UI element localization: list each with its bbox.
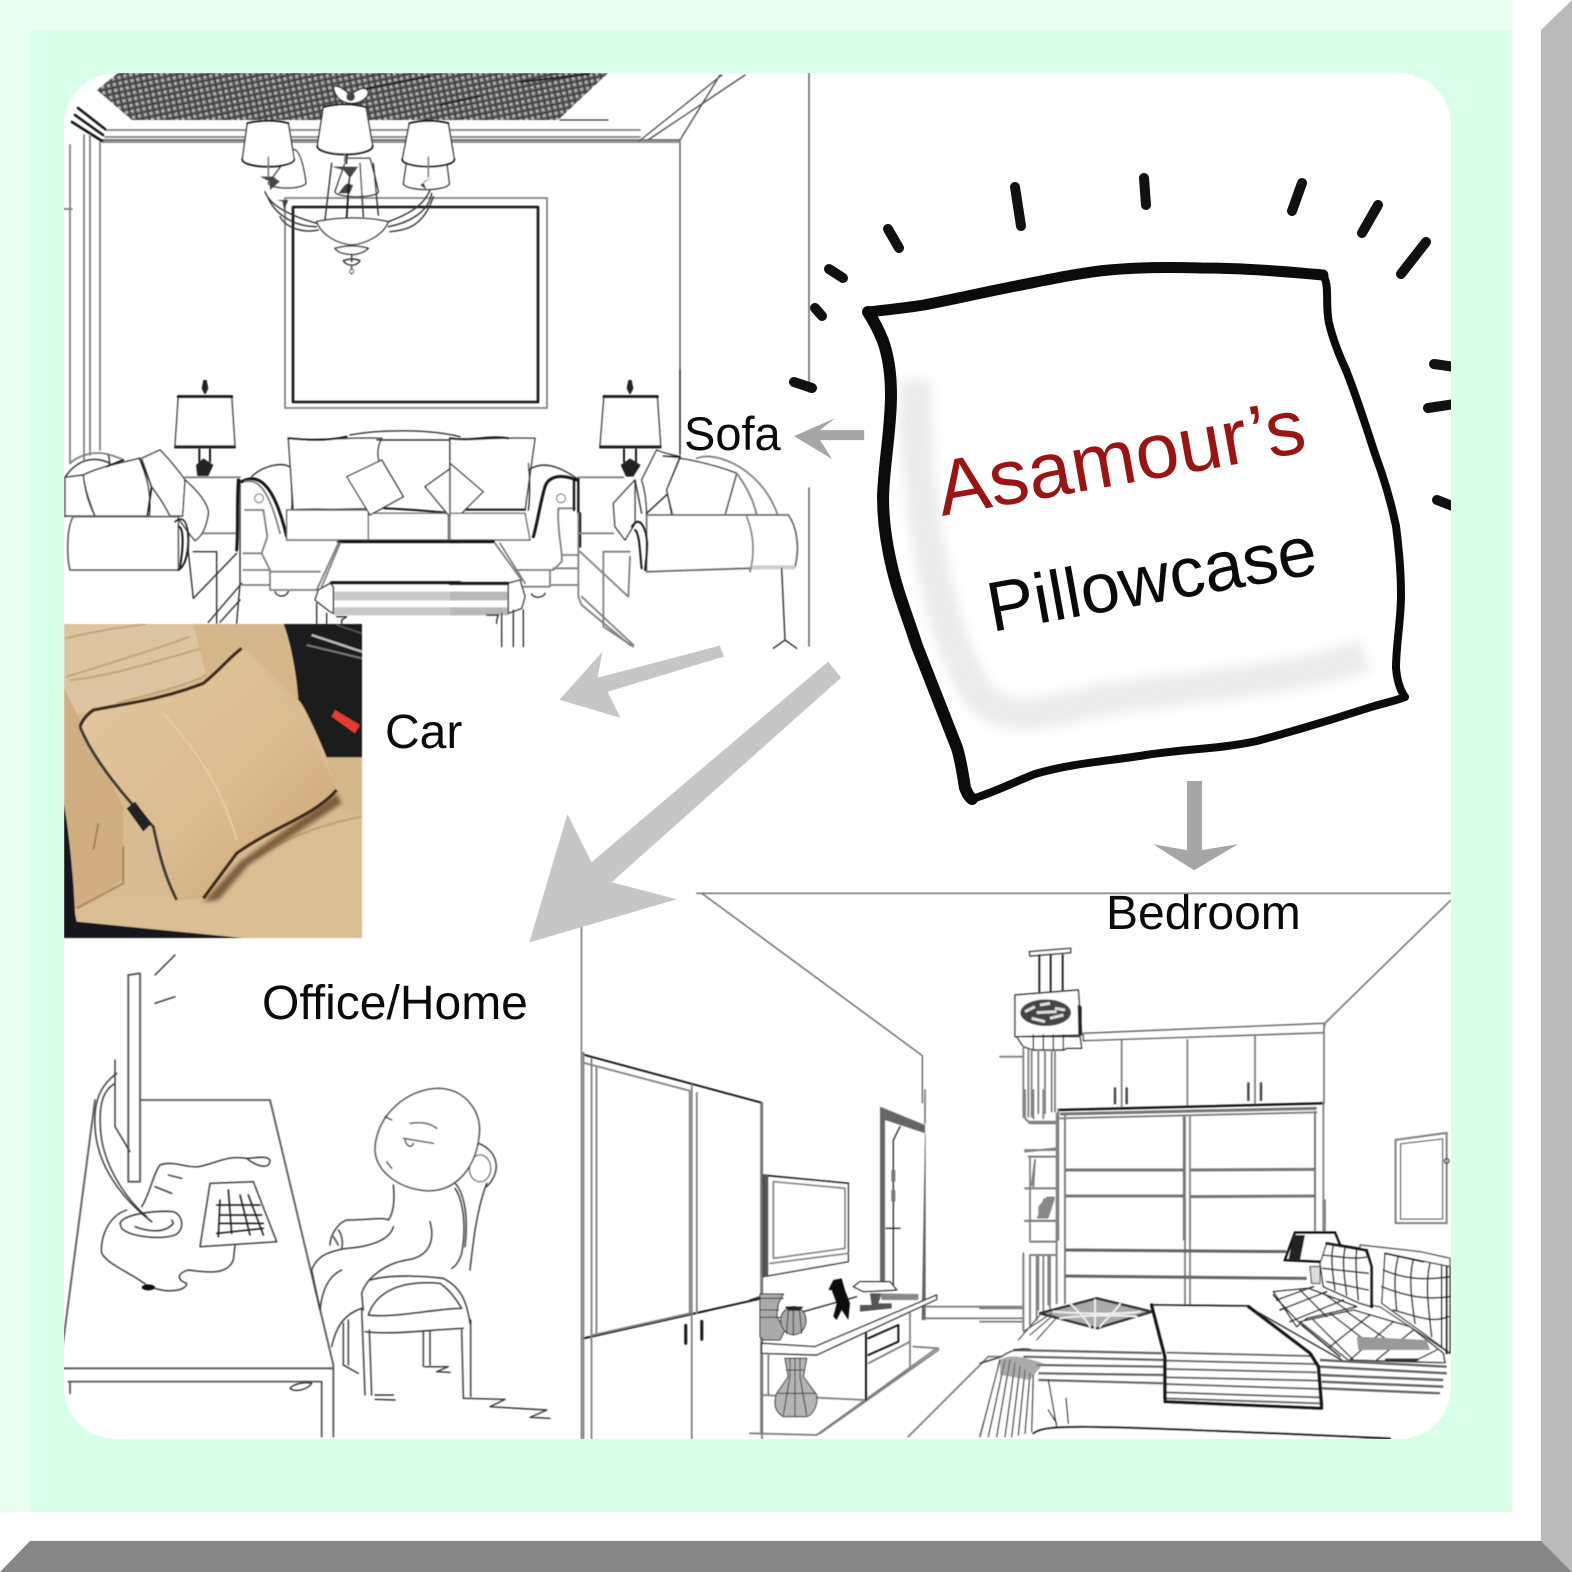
white rounded panel (64, 73, 1451, 1439)
icon: monitor (95, 955, 175, 1222)
illustration: living room sofa scene (64, 73, 809, 648)
wall art (1396, 1133, 1449, 1223)
pillow title: Asamour's: Asamour’s (930, 381, 1312, 533)
icon: mouse cable (101, 1157, 270, 1291)
illustration: bedroom scene (581, 893, 1451, 1439)
arrow: to bedroom (1153, 781, 1238, 870)
arrow: to car (559, 646, 724, 718)
ceiling fixture, cabinets and wardrobe (1000, 948, 1340, 1240)
label: Office/Home: Office/Home (262, 977, 528, 1030)
label: Car: Car (385, 706, 462, 759)
bed with pillows and lamp (980, 1197, 1450, 1438)
arrow: to sofa (794, 418, 864, 459)
pillow subtitle: Pillowcase: Pillowcase (981, 510, 1322, 647)
television, door and cabinet (750, 1090, 1065, 1437)
icon: left lamp and left sofa half (65, 380, 460, 623)
icon: seated character (312, 1088, 550, 1418)
photo: beige car seat pillow (60, 620, 367, 940)
illustration: office desk character (62, 955, 550, 1437)
label: Sofa: Sofa (684, 407, 782, 460)
label: Bedroom: Bedroom (1106, 887, 1301, 940)
arrow: to office (529, 662, 841, 942)
icon: keyboard (200, 1182, 277, 1247)
icon: chandelier (242, 86, 454, 274)
illustration: pillow (868, 267, 1405, 799)
room lines and wardrobe (581, 893, 1451, 1439)
desk (62, 1100, 333, 1437)
icon: right lamp and right sofa half (450, 370, 797, 648)
pillow radiating ticks (794, 178, 1455, 507)
